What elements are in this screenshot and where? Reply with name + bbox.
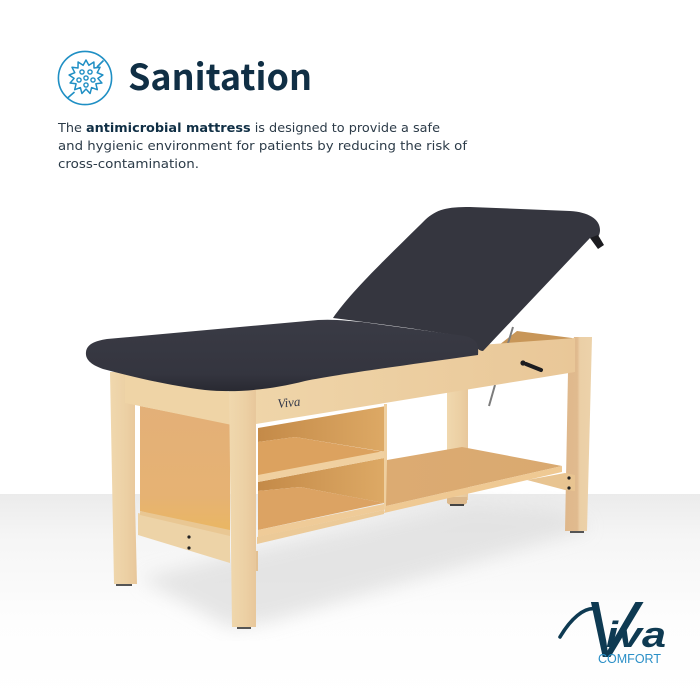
title: Sanitation bbox=[128, 49, 312, 101]
left lower rail bbox=[138, 511, 230, 563]
left apron bbox=[125, 374, 232, 425]
treatment table bbox=[86, 207, 604, 629]
front main leg bbox=[229, 388, 258, 629]
support rod bbox=[489, 327, 513, 406]
far back leg bbox=[447, 385, 468, 506]
backrest latch bbox=[590, 235, 604, 249]
brand logo bbox=[560, 585, 666, 674]
cabinet right edge bbox=[384, 404, 387, 510]
seat pad bbox=[86, 320, 478, 391]
description text: The antimicrobial mattress is designed to provide a safe bbox=[57, 120, 440, 135]
interior of frame under backrest bbox=[490, 331, 574, 352]
description text bbox=[57, 120, 468, 171]
description text: cross-contamination. bbox=[58, 156, 199, 171]
brand logo: V bbox=[584, 585, 644, 674]
left rear leg bbox=[110, 372, 137, 586]
cabinet shelves bbox=[258, 406, 386, 530]
icon: sanitation virus crossed out bbox=[58, 51, 112, 105]
floor shadow bbox=[140, 503, 590, 628]
left cabinet side panel bbox=[140, 406, 230, 534]
lower shelf front edge bbox=[258, 504, 384, 537]
right front leg bbox=[565, 337, 592, 533]
floor background bbox=[0, 494, 700, 700]
brand logo: iva bbox=[606, 614, 666, 655]
right lower rail bbox=[527, 473, 575, 491]
small logo on apron: Viva bbox=[277, 394, 302, 411]
description text: and hygienic environment for patients by reducing the risk of bbox=[58, 138, 468, 153]
long apron bbox=[252, 338, 575, 424]
backrest pad bbox=[333, 207, 600, 351]
adjustment handle bbox=[520, 360, 541, 370]
front lower rail bbox=[257, 510, 384, 544]
upper shelf front edge bbox=[258, 451, 384, 482]
brand logo: COMFORT bbox=[598, 652, 661, 666]
open lower shelf bbox=[384, 447, 562, 513]
